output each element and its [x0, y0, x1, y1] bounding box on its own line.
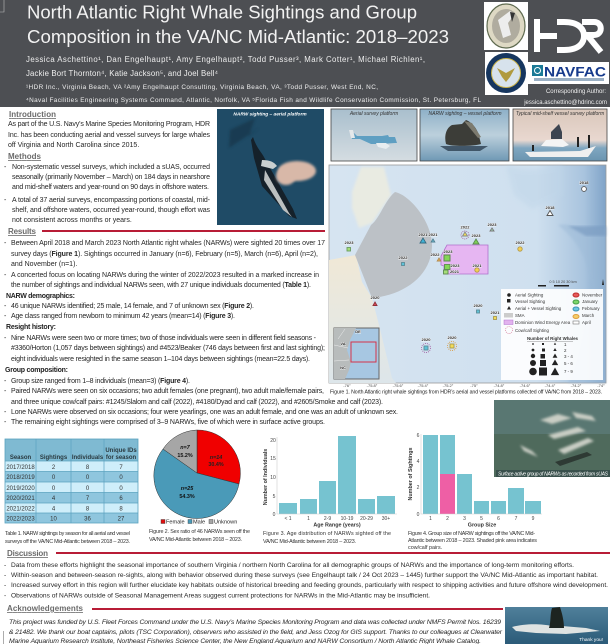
sighting markers: 2021	[429, 232, 438, 237]
figure 3: age distribution bar chart: 20	[270, 438, 276, 444]
figure 3: age distribution bar chart: 30+	[382, 516, 390, 522]
subheading: NARW demographics: NARW demographics:	[6, 293, 75, 300]
table 1: sightings by season: 0	[86, 486, 90, 492]
table 1: sightings by season: 10	[50, 516, 57, 522]
text: methods bullets: Non-systematic vessel surveys, which included a sUAS, occurred	[12, 164, 210, 171]
figure 4: group size bar chart: 5	[480, 516, 483, 522]
legend: number of right whales: 7 - 9	[564, 369, 573, 374]
table 1: sightings by season: for season	[106, 455, 137, 461]
figure 2 caption: Figure 2. Sex ratio of 46 NARWs seen off the	[149, 529, 250, 535]
figure 2: pie chart of sex ratio	[154, 430, 240, 526]
inset map: VA	[340, 341, 346, 346]
table 1: sightings by season: 0	[119, 475, 123, 481]
sighting markers: 2022	[516, 240, 525, 245]
Dominion Wind Energy Area	[441, 245, 488, 274]
map axis labels	[343, 383, 605, 388]
title	[27, 2, 449, 47]
figure 4: group size bar chart: 3	[463, 516, 466, 522]
subheading: Resight history: Resight history:	[6, 324, 56, 331]
map axis labels: -75.2°	[443, 383, 454, 388]
sighting markers: 2018	[580, 180, 589, 185]
sighting markers: 2022	[431, 252, 440, 257]
figure 4: group size bar chart: Number of Sightings	[408, 447, 414, 501]
text: methods bullets	[4, 164, 211, 224]
figure 4: group size bar chart: Group Size	[468, 522, 496, 528]
heading: Methods: Methods	[8, 152, 42, 161]
legend: number of right whales: 2	[564, 348, 567, 353]
map axis labels: -75.4°	[418, 383, 429, 388]
sighting markers: 2020	[371, 295, 380, 300]
table 1: sightings by season: 8	[86, 465, 90, 471]
figure 3: age distribution bar chart: 20-29	[360, 516, 373, 522]
photo: aerial NARW sighting: NARW sighting – aerial platform	[233, 112, 307, 118]
table 1: sightings by season: 8	[86, 506, 90, 512]
table 1: sightings by season: 4	[52, 496, 56, 502]
text: discussion bullets: Increased survey effort in this region will further elucidate key habitats outside of historical breeding and feeding grounds, particularly with respect to shipping activities and future offshore wind development.	[11, 582, 608, 589]
photo: NARW sighting vessel platform: NARW sighting – vessel platform	[428, 111, 502, 117]
text: introduction: As part of the U.S. Navy’s Marine Species Monitoring Program, HDR	[8, 121, 210, 128]
text: group composition bullets: -	[4, 419, 7, 426]
photo: typical mid-shelf vessel survey platform: Typical mid-shelf vessel survey platform	[516, 111, 604, 117]
SMA shaded area	[355, 192, 432, 298]
text: demographics bullets: -	[4, 313, 7, 320]
figure 3: age distribution bar chart: 1	[307, 516, 310, 522]
table 1: sightings by season: 2021/2022	[6, 506, 35, 512]
heading: Discussion: Discussion	[7, 549, 48, 558]
sighting markers: 2021	[450, 269, 460, 274]
sighting markers: 2022	[461, 224, 470, 230]
legend: months: January	[582, 299, 598, 304]
corresponding author	[523, 89, 607, 106]
table 1: sightings by season: Sightings	[40, 455, 68, 461]
legend: platform types: Aerial Sighting	[515, 292, 544, 298]
text: group composition bullets: -	[4, 378, 7, 385]
figure 2: pie chart of sex ratio: 15.2%	[177, 453, 193, 459]
legend: platform types: SMA	[515, 313, 525, 318]
figure 4: group size bar chart: 6	[497, 516, 500, 522]
text: discussion bullets: Data from these efforts highlight the seasonal importance of southern Virginia / northern North Carolina for all demographic groups of NARWs and the importance of long-term monitoring efforts.	[11, 562, 574, 569]
pie legend: Unknown	[214, 520, 237, 526]
affiliations: ⁴Naval Facilities Engineering Systems Command, Atlantic, Norfolk, VA ⁵Florida Fish and Wildlife Conservation Commission, St. Petersburg, FL	[26, 97, 481, 104]
figure 4: group size bar chart: 2	[446, 516, 449, 522]
legend: months: April	[582, 320, 591, 325]
text: discussion bullets: -	[4, 582, 6, 589]
figure 2: pie chart of sex ratio: n=14	[210, 455, 222, 461]
map: sightings	[329, 165, 606, 388]
table 1: sightings by season: 4	[52, 506, 56, 512]
text: introduction: Inc. has been conducting aerial and vessel surveys for large whales	[8, 132, 210, 139]
logo: US Navy	[485, 52, 528, 95]
figure 2: pie chart of sex ratio: n=25	[181, 486, 194, 492]
figure 4: group size bar chart: 0	[417, 512, 420, 518]
photo: whale fluke thank you	[505, 607, 608, 644]
table 1: sightings by season: 27	[118, 516, 125, 522]
map axis labels: -74.2°	[571, 383, 582, 388]
map axis labels: -74.6°	[520, 383, 531, 388]
table 1: sightings by season: 6	[119, 496, 123, 502]
subheading: Group composition: Group composition:	[5, 367, 68, 374]
sighting markers: 2021	[491, 310, 500, 315]
figure 3 caption: VA/NC Mid-Atlantic between 2018 – 2023.	[263, 539, 356, 545]
title: North Atlantic Right Whale Sightings and Group	[27, 2, 417, 22]
inset map: DE	[355, 329, 361, 334]
table 1: sightings by season: Individuals	[72, 455, 104, 461]
pie legend: Female	[166, 520, 185, 526]
pie legend: Male	[193, 520, 205, 526]
figure 3 caption	[263, 531, 391, 545]
text: discussion bullets: Within-season and between-season re-sights, along with behavior observed during these surveys (see Engelhaupt talk / 24 Oct 2023 – 1445) further support the VA/NC Mid-Atlantic as important habitat.	[11, 572, 598, 579]
figure 3: age distribution bar chart: 0	[273, 512, 276, 518]
map base	[329, 165, 606, 383]
legend: number of right whales: Number of Right Whales	[527, 336, 579, 341]
text: demographics bullets: -	[4, 303, 7, 310]
text: demographics bullets: 46 unique NARWs identified; 25 male, 14 female, and 7 of unknown sex (Figure 2).	[11, 303, 254, 310]
table 1: sightings by season: 0	[86, 475, 90, 481]
corresponding author: jessica.aschettino@hdrinc.com	[523, 100, 607, 106]
figure 1 caption: Figure 1. North Atlantic right whale sightings from HDR’s aerial and vessel platforms collected off VA/NC from 2018 – 2023.	[330, 390, 602, 396]
map axis labels: -76°	[343, 383, 351, 388]
table 1 caption	[5, 531, 130, 545]
corresponding author: Corresponding Author:	[546, 89, 606, 95]
heading: Results: Results	[8, 227, 37, 236]
legend: number of right whales: 1	[564, 342, 567, 347]
sighting markers: 2023	[345, 240, 354, 245]
text: group composition bullets: Group size ranged from 1–8 individuals (mean=3) (Figure 4).	[11, 378, 190, 385]
text: methods bullets: A total of 37 aerial surveys, encompassing portions of coastal, mid-	[12, 197, 211, 204]
heading: Introduction: Introduction	[9, 110, 56, 119]
header banner	[0, 0, 610, 107]
map legend	[501, 289, 603, 380]
sighting markers: 2023	[472, 233, 481, 238]
sighting markers: 2021	[419, 232, 428, 237]
text: results bullets: survey days (Figure 1). Sightings occurred in January (n=6), February (n=5), March (n=6), April (n=2),	[11, 251, 318, 258]
table 1: sightings by season: Unique IDs	[105, 448, 137, 454]
legend: months: February	[582, 306, 600, 311]
sighting markers: 2018	[546, 205, 555, 210]
text: methods bullets: -	[4, 197, 7, 204]
text: methods bullets: not consistent across months or years.	[12, 217, 132, 224]
photo: whale fluke thank you: Thank you!	[579, 637, 603, 643]
text: acknowledgements: This project was funded by U.S. Fleet Forces Command under the U.S. Navy’s Marine Species Monitoring Program and data was collected under NMFS Permit Nos. 16239	[9, 619, 501, 626]
figure 3: age distribution bar chart	[263, 436, 397, 528]
table 1: sightings by season: 2022/2023	[6, 516, 35, 522]
sighting markers: 2023	[444, 249, 453, 254]
legend: number of right whales: 3 - 4	[564, 354, 573, 359]
figure 2 caption: VA/NC Mid-Atlantic between 2018 – 2023.	[149, 537, 242, 543]
map axis labels: -75.8°	[367, 383, 378, 388]
legend: number of right whales	[527, 336, 579, 376]
text: methods bullets: and mid-shelf waters and year-round on 90 days in offshore waters.	[12, 184, 209, 191]
figure 3: age distribution bar chart: 5	[273, 494, 276, 500]
text: results bullets: Between April 2018 and March 2023 North Atlantic right whales (NARWs) were sighted 20 times over 17	[11, 240, 325, 247]
table 1: sightings by season: 2017/2018	[6, 465, 35, 471]
text: acknowledgements	[9, 619, 503, 644]
text: results bullets: and November (n=1).	[11, 261, 77, 268]
inset map: NC	[340, 365, 346, 370]
figure 3: age distribution bar chart: Age Range (years)	[313, 522, 361, 528]
sighting markers: 2023	[451, 263, 460, 268]
text: discussion bullets: -	[4, 572, 6, 579]
text: group composition bullets: and three unique cow/calf pairs: #1245/Slalom and calf (2022), #4180/Dyad and calf (2022), and #2605/Smoke and calf (2023).	[11, 399, 383, 406]
text: group composition bullets: -	[4, 409, 7, 416]
legend: platform types: Cow/calf Sighting	[515, 328, 549, 333]
authors	[26, 55, 425, 78]
figure 4: group size bar chart: 7	[515, 516, 518, 522]
scale bar: 0 5 10 20 30 km	[549, 280, 577, 284]
photo: surface active group: Surface active group of NARWs as recorded from sUAS	[498, 472, 609, 478]
inset map	[334, 328, 379, 379]
figure 3: age distribution bar chart: 10	[270, 475, 276, 481]
table 1: sightings by season: 0	[52, 486, 56, 492]
figure 2: pie chart of sex ratio: n=7	[180, 445, 191, 451]
figure 4 caption: Figure 4. Group size of NARW sightings off the VA/NC Mid-	[408, 531, 535, 537]
sighting markers: 2020	[422, 337, 431, 342]
text: methods bullets: shelf, and offshore waters, occurred year-round, though effort was	[12, 207, 210, 214]
map axis labels: -75°	[470, 383, 478, 388]
sighting markers: 2023	[488, 222, 497, 227]
table 1: sightings by season: 36	[84, 516, 91, 522]
text: group composition bullets: Lone NARWs were observed on six occasions; four were yearlings, one was an adult female, and one was an adult of unknown sex.	[11, 409, 398, 416]
figure 4: group size bar chart: 9	[532, 516, 535, 522]
text: introduction: off Virginia and North Carolina since 2015.	[8, 142, 139, 149]
map axis labels: -74.4°	[545, 383, 556, 388]
legend: platform types: Vessel Sighting	[515, 299, 546, 304]
map axis labels: -74°	[597, 383, 605, 388]
figure 4 caption	[408, 531, 537, 551]
figure 4: group size bar chart: 1	[429, 516, 432, 522]
photo: NARW sighting vessel platform	[420, 109, 509, 161]
heading: Acknowledgements: Acknowledgements	[7, 604, 84, 613]
table 1: sightings by season: 2020/2021	[6, 496, 35, 502]
table 1: sightings by season	[5, 439, 138, 523]
photo: aerial survey platform	[331, 109, 417, 161]
photo: typical mid-shelf vessel survey platform	[513, 109, 607, 161]
sighting markers	[345, 180, 589, 352]
text: results bullets	[4, 240, 325, 289]
text: resight history bullets: eight individuals were resighted in the same season 1–104 days between sightings (mean=22.5 days).	[11, 356, 310, 363]
text: discussion bullets	[4, 562, 608, 600]
table 1: sightings by season: 0	[119, 486, 123, 492]
map axis labels: -74.8°	[494, 383, 505, 388]
table 1: sightings by season: 2019/2020	[6, 486, 35, 492]
affiliations	[26, 84, 481, 104]
figure 3 caption: Figure 3. Age distribution of NARWs sighted off the	[263, 531, 391, 537]
text: resight history bullets: Nine NARWs were seen two or more times; two of those individuals were seen in different field seasons -	[11, 335, 317, 342]
text: group composition bullets	[4, 378, 398, 426]
text: group composition bullets: The remaining eight sightings were comprised of 3–9 NARWs, five of which were in surface active groups.	[11, 419, 325, 426]
text: discussion bullets: -	[4, 562, 6, 569]
text: demographics bullets: Age class ranged from newborn to minimum 42 years (mean=14) (Figure 3).	[11, 313, 235, 320]
scale bar	[538, 279, 604, 286]
sighting markers: 2020	[474, 303, 483, 308]
title: Composition in the VA/NC Mid-Atlantic: 2018–2023	[27, 27, 449, 47]
figure 4: group size bar chart	[408, 433, 542, 528]
figure 4: group size bar chart: 4	[417, 459, 420, 465]
logo: NAVFAC	[528, 62, 609, 84]
text: group composition bullets: Paired NARWs were seen on six occasions; two adult females (one pregnant), two adult male/female pairs,	[11, 388, 324, 395]
legend: platform types: Dominion Wind Energy Area	[515, 320, 571, 325]
logo: NAVFAC: NAVFAC	[544, 64, 606, 80]
legend: months: March	[582, 313, 595, 318]
logo: Florida Fish and Wildlife Commission	[484, 2, 528, 50]
figure 3: age distribution bar chart: < 1	[284, 516, 292, 522]
sighting markers: 2021	[473, 263, 482, 268]
sighting markers: 2022	[399, 255, 408, 260]
map axis labels: -75.6°	[393, 383, 404, 388]
pie legend	[161, 520, 237, 526]
table 1: sightings by season: 8	[119, 506, 123, 512]
figure 2 caption	[149, 529, 250, 543]
text: group composition bullets: -	[4, 388, 7, 395]
figure 3: age distribution bar chart: Number of Individuals	[263, 449, 269, 505]
figure 4: group size bar chart: 2	[417, 485, 420, 491]
figure 4: group size bar chart: 6	[417, 433, 420, 439]
logo: HDR	[537, 19, 601, 52]
authors: Jessica Aschettino¹, Dan Engelhaupt¹, Amy Engelhaupt², Todd Pusser³, Mark Cotter¹, Michael Richlen¹,	[26, 55, 425, 64]
text: introduction	[8, 121, 210, 149]
text: methods bullets: -	[4, 164, 7, 171]
text: discussion bullets: -	[4, 592, 6, 600]
sighting markers: 2020	[448, 335, 457, 340]
photo: aerial survey platform: Aerial survey platform	[349, 111, 398, 117]
photo: aerial NARW sighting	[217, 109, 324, 225]
figure 3: age distribution bar chart: 10-19	[341, 516, 354, 522]
table 1 caption: Table 1. NARW sightings by season for all aerial and vessel	[5, 531, 130, 537]
figure 4 caption: Atlantic between 2018 – 2023. Shaded pink area indicates	[408, 538, 537, 544]
figure 3: age distribution bar chart: 2-9	[324, 516, 331, 522]
legend: platform types	[504, 292, 571, 334]
legend: months: November	[582, 292, 603, 298]
text: demographics bullets	[4, 303, 254, 320]
figure 2: pie chart of sex ratio: 30.4%	[208, 462, 224, 468]
legend: platform types: Aerial + Vessel Sighting	[515, 306, 562, 311]
text: acknowledgements: & 21482. We thank our boat captains, pilots (TSC Corporation), observers who assisted in the field, and Jess Ozog for GIS support. Thanks to our colleagues at Clearwater	[9, 629, 503, 636]
text: resight history bullets	[4, 335, 325, 363]
text: results bullets: the number of sightings and individual NARWs seen, with 27 unique individuals documented (Table 1).	[11, 282, 311, 289]
legend: number of right whales: 5 - 6	[564, 361, 573, 366]
table 1: sightings by season: 7	[86, 496, 90, 502]
text: results bullets: -	[4, 240, 7, 247]
table 1: sightings by season: 0	[52, 475, 56, 481]
table 1: sightings by season: 7	[119, 465, 123, 471]
table 1: sightings by season: Season	[10, 455, 32, 461]
text: results bullets: -	[4, 272, 7, 279]
photo: surface active group	[494, 400, 610, 478]
affiliations: ¹HDR Inc., Virginia Beach, VA ²Amy Engelhaupt Consulting, Virginia Beach, VA, ³Todd Pusser, West End, NC,	[26, 84, 378, 91]
text: resight history bullets: -	[4, 335, 7, 342]
text: results bullets: A concerted focus on locating NARWs during the winter of 2022/2023 resulted in a marked increase in	[11, 272, 319, 279]
text: methods bullets: seasonally (primarily November – March) on 184 days in nearshore	[12, 174, 210, 181]
text: discussion bullets: Observations of NARWs outside of Seasonal Management Areas suggest current protections for NARWs in the Mid-Atlantic may be insufficient.	[11, 592, 430, 600]
legend: months	[573, 292, 603, 325]
table 1: sightings by season: 2018/2019	[6, 475, 35, 481]
table 1: sightings by season: 2	[52, 465, 56, 471]
authors: Jackie Bort Thornton⁴, Katie Jackson⁵, and Joel Bell⁴	[26, 69, 218, 78]
figure 4 caption: cow/calf pairs.	[408, 545, 442, 551]
text: resight history bullets: #3360/Horton (1,057 days between sightings) and #4523/Beaker (746 days between first and last sighting);	[11, 345, 325, 352]
table 1 caption: surveys off the VA/NC Mid-Atlantic between 2018 – 2023.	[5, 539, 130, 545]
figure 3: age distribution bar chart: 15	[270, 456, 276, 462]
figure 2: pie chart of sex ratio: 54.3%	[179, 494, 195, 500]
